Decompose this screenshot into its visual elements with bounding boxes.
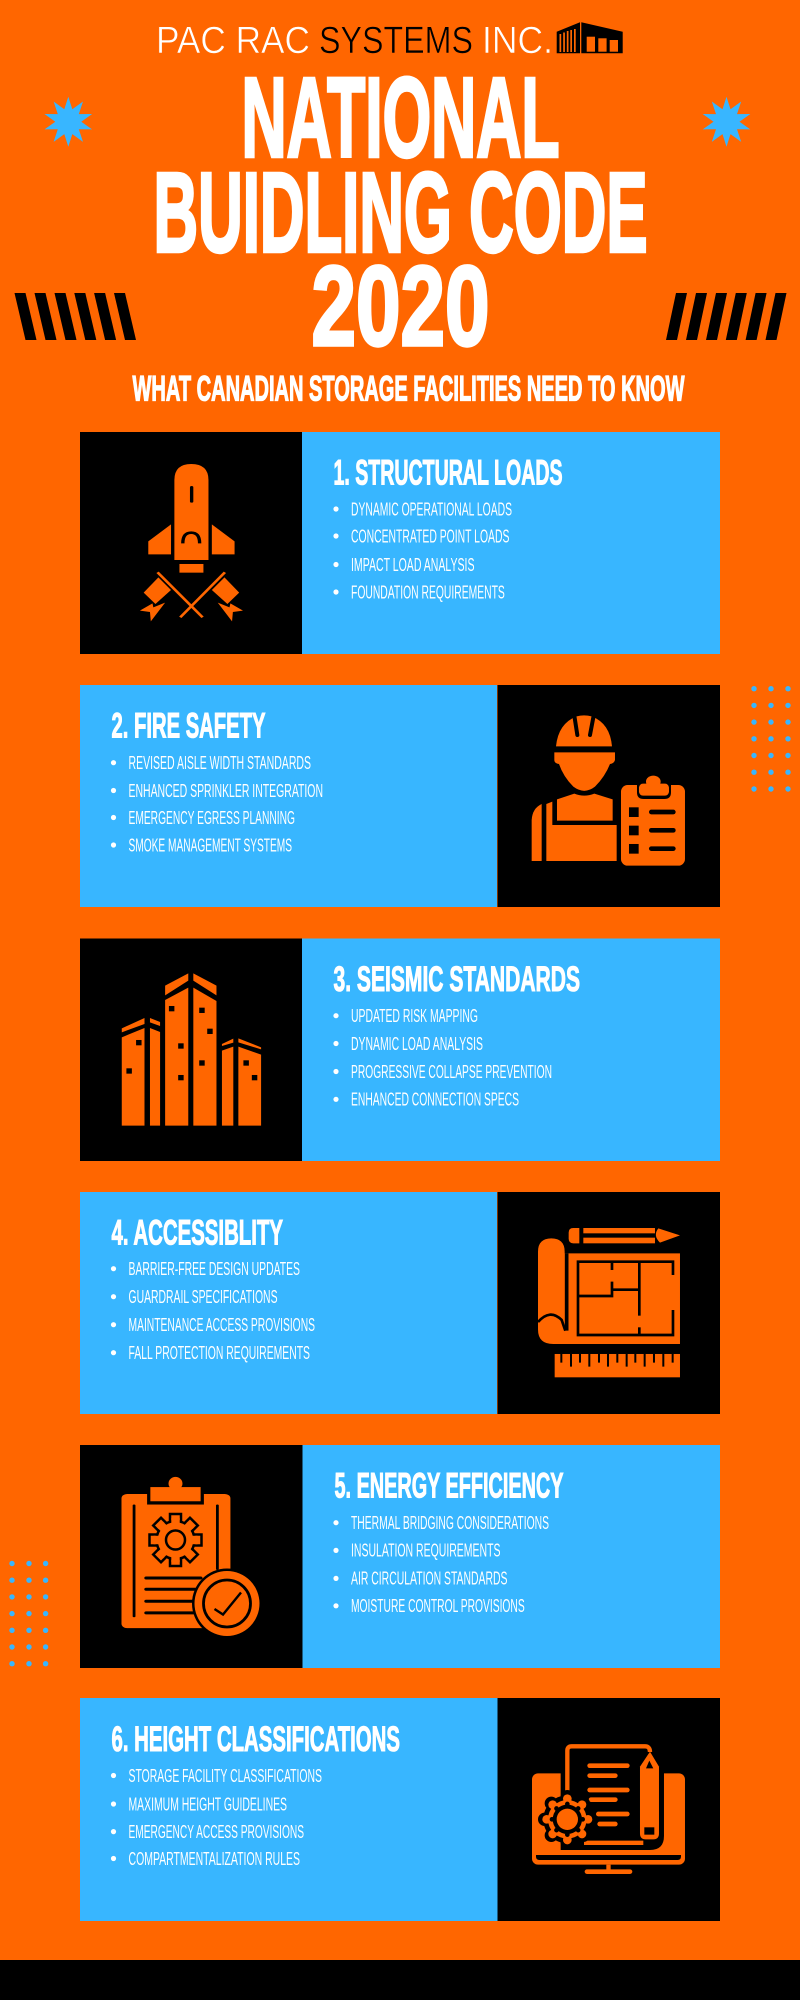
bullet list: DYNAMIC LOAD ANALYSIS [351,1034,483,1054]
bullet list: COMPARTMENTALIZATION RULES [128,1849,300,1869]
star burst right [703,97,750,147]
title: NATIONAL [242,54,560,180]
heading: 2. FIRE SAFETY [112,706,266,746]
title: 2020 [312,243,490,369]
bullet list: IMPACT LOAD ANALYSIS [351,555,474,575]
bullet list: PROGRESSIVE COLLAPSE PREVENTION [351,1062,552,1082]
bullet list: ENHANCED SPRINKLER INTEGRATION [128,781,323,801]
bullet list: ENHANCED CONNECTION SPECS [351,1090,519,1110]
bullet list [333,499,512,602]
bullet list: EMERGENCY EGRESS PLANNING [128,808,295,828]
footer band [0,1960,800,2000]
bullet list: MAXIMUM HEIGHT GUIDELINES [128,1794,287,1814]
bullet list: EMERGENCY ACCESS PROVISIONS [128,1822,304,1842]
bullet list: FOUNDATION REQUIREMENTS [351,582,505,602]
bullet list [333,1006,552,1110]
bullet list [111,1259,315,1363]
panel 2: fire safety [80,685,720,907]
heading: 4. ACCESSIBLITY [112,1212,283,1252]
bullet list: CONCENTRATED POINT LOADS [351,526,509,546]
gear [150,1514,202,1566]
bullet list: GUARDRAIL SPECIFICATIONS [128,1287,278,1307]
bullet list [333,1513,549,1616]
logo: Pac Rac Systems Inc.: PAC RAC [156,20,310,62]
bullet list: FALL PROTECTION REQUIREMENTS [128,1343,310,1363]
bullet list [111,753,323,855]
dot grid right [751,686,791,792]
bullet list: MOISTURE CONTROL PROVISIONS [351,1596,525,1616]
bullet list: AIR CIRCULATION STANDARDS [351,1569,508,1589]
icon: construction worker with clipboard [532,715,685,866]
bullet list: UPDATED RISK MAPPING [351,1006,478,1026]
hazard stripes left [14,293,136,340]
bullet list [111,1766,322,1869]
icon: monitor with document, pencil and gear [532,1740,685,1874]
logo: Pac Rac Systems Inc. [156,20,623,62]
bullet list: DYNAMIC OPERATIONAL LOADS [351,499,512,519]
bullet list: REVISED AISLE WIDTH STANDARDS [128,753,311,773]
panel 3: seismic standards [80,938,720,1161]
logo: Pac Rac Systems Inc.: SYSTEMS [319,20,473,62]
dot grid left [9,1561,48,1666]
heading: 6. HEIGHT CLASSIFICATIONS [112,1719,400,1759]
icon: blueprint, pencil and ruler [538,1228,680,1377]
panel 5: energy efficiency [80,1445,720,1668]
title [154,54,648,369]
panel 6: height classifications [80,1698,720,1921]
star burst left [45,97,92,147]
bullet list: SMOKE MANAGEMENT SYSTEMS [128,835,292,855]
bullet list: INSULATION REQUIREMENTS [351,1541,500,1561]
logo: Pac Rac Systems Inc.: INC. [482,20,553,62]
icon: tall buildings [122,973,261,1126]
panel 1: structural loads [80,432,720,654]
bullet list: STORAGE FACILITY CLASSIFICATIONS [128,1766,322,1786]
gear [538,1790,597,1849]
heading: 3. SEISMIC STANDARDS [334,959,580,999]
bullet list: MAINTENANCE ACCESS PROVISIONS [128,1315,315,1335]
heading: 5. ENERGY EFFICIENCY [334,1466,564,1506]
bullet list: THERMAL BRIDGING CONSIDERATIONS [351,1513,549,1533]
hazard stripes right [666,293,786,340]
heading: 1. STRUCTURAL LOADS [334,452,562,492]
panel 4: accessibility [80,1192,720,1414]
icon: clipboard with gear and check badge [121,1477,262,1638]
icon: rocket and crossed flags [140,464,243,621]
bullet list: BARRIER-FREE DESIGN UPDATES [128,1259,300,1279]
check badge [192,1568,262,1638]
